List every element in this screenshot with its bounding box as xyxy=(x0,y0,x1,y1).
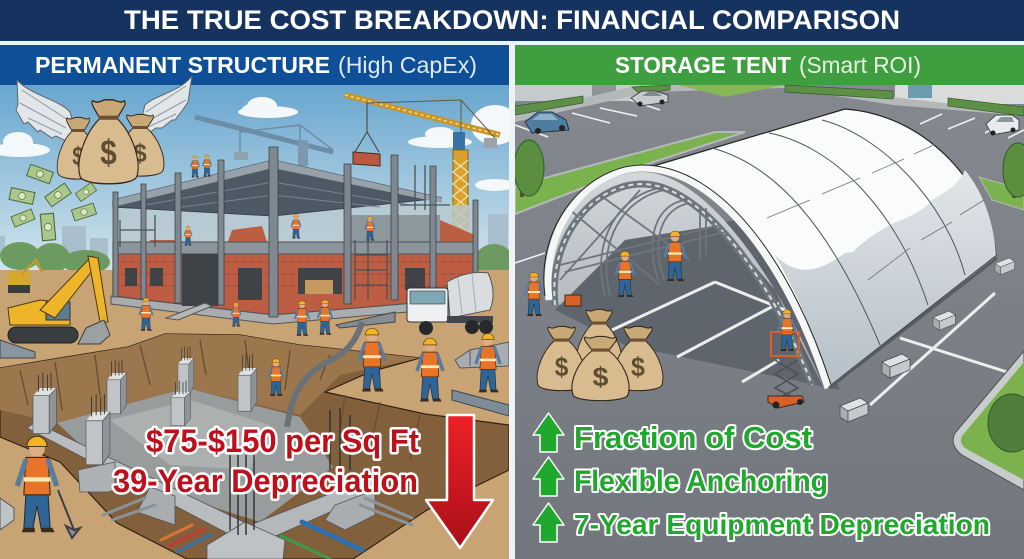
benefit: flexible anchoring: Flexible Anchoring xyxy=(574,465,828,498)
stacked steel beams xyxy=(0,340,509,530)
panel: storage tent xyxy=(514,45,1024,559)
header: permanent structure xyxy=(0,45,509,85)
sky xyxy=(0,85,509,275)
header: storage tent: STORAGE TENT xyxy=(615,52,791,78)
buried pipes xyxy=(103,498,412,559)
right wing xyxy=(138,76,192,132)
shadow floor beneath tent xyxy=(555,215,840,390)
anchor blocks xyxy=(840,258,1015,422)
panel: permanent structure xyxy=(0,45,519,559)
tent canopy xyxy=(544,109,996,388)
ramp and materials xyxy=(166,303,395,328)
icon: flying money bags with wings xyxy=(16,76,192,184)
scaffolding xyxy=(120,165,450,300)
upper workers xyxy=(184,155,375,245)
excavator xyxy=(8,256,110,344)
pit and foreground workers xyxy=(17,328,500,532)
cars xyxy=(525,91,1019,136)
scene: parking lot xyxy=(514,85,1024,559)
title banner: THE TRUE COST BREAKDOWN: FINANCIAL COMPARISON xyxy=(124,5,900,35)
rubble pile xyxy=(455,342,509,368)
toolbox xyxy=(565,295,581,306)
background excavator xyxy=(8,260,42,293)
header: permanent structure: PERMANENT STRUCTURE xyxy=(35,52,330,78)
cost callout: $75-$150 per Sq Ft xyxy=(146,423,419,459)
roof slab xyxy=(113,160,442,216)
background building xyxy=(515,85,1024,104)
asphalt xyxy=(515,85,1024,559)
building xyxy=(111,147,478,324)
city skyline xyxy=(0,214,508,258)
canopy ribs xyxy=(712,120,965,345)
site workers xyxy=(139,298,332,336)
pit floor concrete xyxy=(57,388,333,522)
openings xyxy=(125,254,425,306)
shovel xyxy=(58,490,80,538)
hedges xyxy=(515,85,1024,116)
clouds xyxy=(0,97,519,191)
back interior xyxy=(118,205,472,242)
scissor lift with worker xyxy=(768,310,804,408)
header: storage tent: (Smart ROI) xyxy=(799,52,921,78)
ground xyxy=(0,270,509,559)
crane: blue background xyxy=(195,117,333,166)
cost callout xyxy=(113,423,419,499)
falling banknotes xyxy=(9,164,97,241)
trees xyxy=(0,242,509,270)
concrete columns xyxy=(33,346,350,535)
lawn strip with curb xyxy=(515,132,745,214)
benefit: flexible anchoring xyxy=(533,457,828,498)
title banner xyxy=(0,0,1024,41)
front rim xyxy=(548,168,828,388)
foundation strip xyxy=(111,296,475,324)
workers xyxy=(525,231,685,316)
lawn right xyxy=(979,177,1024,210)
crane: yellow tower xyxy=(345,95,500,236)
cost callout: 39-Year Depreciation xyxy=(113,463,418,499)
tent base rail xyxy=(829,258,997,388)
floor slab xyxy=(113,242,476,254)
scene: construction site xyxy=(0,85,519,559)
parking stripes: upper xyxy=(515,100,1024,263)
trees xyxy=(514,140,1024,198)
concrete pump hose xyxy=(287,322,362,427)
parking stripes: lower xyxy=(612,282,1007,405)
arrow: red down xyxy=(426,415,493,548)
tent interior and truss xyxy=(549,172,825,390)
left wing xyxy=(16,80,78,140)
benefit: fraction of cost: Fraction of Cost xyxy=(574,420,812,455)
benefits list xyxy=(533,413,990,542)
icon: money bags xyxy=(537,309,663,401)
header: storage tent xyxy=(515,45,1024,85)
lower shaded canopy xyxy=(775,170,996,386)
header: permanent structure: (High CapEx) xyxy=(338,52,477,78)
excavation pit xyxy=(0,334,509,559)
bottom-right lawn xyxy=(953,351,1024,490)
concrete mixer truck xyxy=(407,272,493,335)
benefit: equipment depreciation: 7-Year Equipment Depreciation xyxy=(574,509,990,540)
brick ground floor xyxy=(113,250,475,315)
sidewalk xyxy=(515,85,1024,122)
foundation beams xyxy=(27,422,250,540)
steel columns xyxy=(113,147,478,317)
top lawn xyxy=(679,85,785,97)
